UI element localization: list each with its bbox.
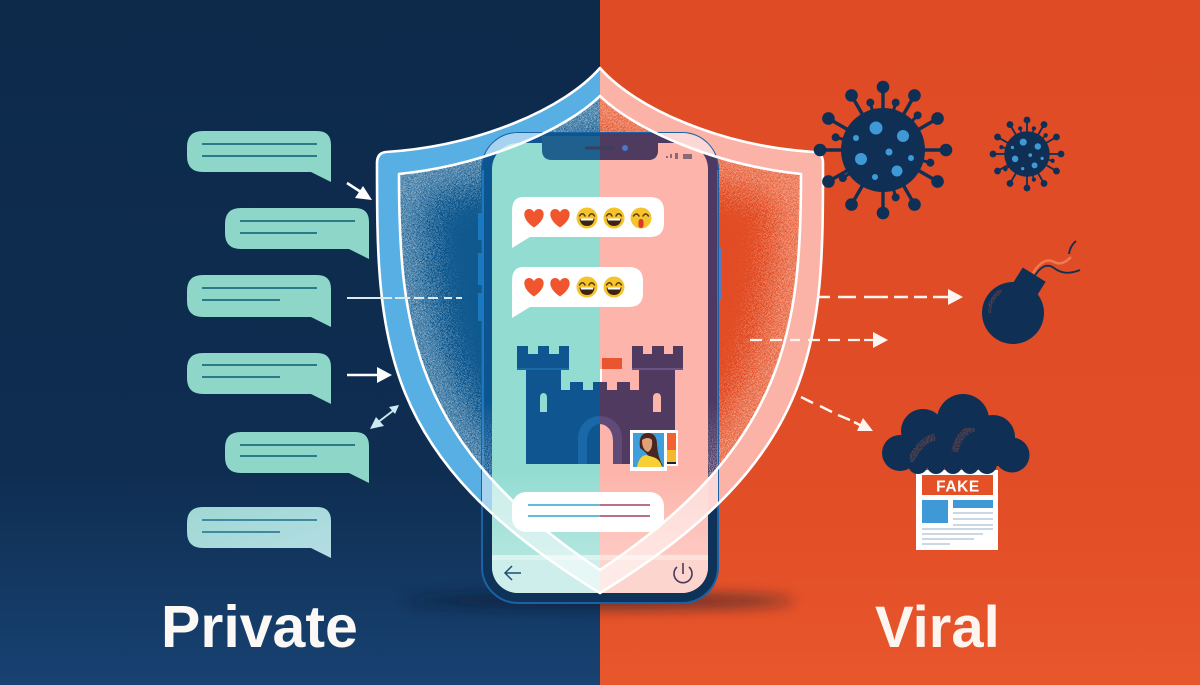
phone screen — [492, 143, 708, 593]
message input — [512, 492, 664, 532]
phone side buttons — [478, 213, 722, 321]
shield outlines — [377, 68, 823, 593]
arrow: diagonal into shield — [347, 183, 372, 200]
background: viral side — [600, 0, 1200, 685]
arrow: dashed mid — [750, 332, 888, 348]
phone — [478, 130, 722, 610]
chat bubble 2 — [225, 208, 369, 259]
tongue emoji — [630, 208, 652, 228]
chat bubble 5 — [225, 432, 369, 483]
castle left half — [517, 346, 600, 464]
newspaper — [916, 470, 998, 550]
newspaper: FAKE — [936, 478, 980, 496]
chat bubbles column — [187, 131, 369, 558]
flag — [600, 358, 622, 382]
back icon — [505, 566, 521, 580]
speaker and camera — [585, 145, 628, 151]
photo cards — [630, 430, 678, 471]
shield glass overlay — [480, 130, 720, 605]
castle windows — [540, 393, 661, 412]
shield body — [378, 70, 822, 501]
arrow: dashed line through shield — [347, 297, 462, 299]
background: private side — [0, 0, 600, 685]
chat bubble 1 — [187, 131, 331, 182]
bomb fuse — [1033, 241, 1080, 279]
emoji bubble one — [512, 197, 664, 248]
phone body — [480, 130, 720, 610]
arrow: solid into shield — [347, 367, 392, 383]
storm cloud — [882, 394, 1030, 474]
castle — [517, 346, 683, 464]
heading: Private: Private — [161, 594, 358, 660]
chat bubble 3 — [187, 275, 331, 327]
phone ground shadow — [405, 594, 795, 608]
icon: large virus — [814, 81, 952, 219]
arrow: dashed to cloud — [801, 397, 873, 431]
icon: bomb — [982, 241, 1080, 344]
heading: Viral: Viral — [875, 595, 1000, 660]
arrow: double headed — [370, 405, 399, 429]
icon: fake news — [882, 394, 1030, 550]
chat bubble 6 — [187, 507, 331, 558]
power icon — [674, 563, 692, 583]
emoji bubble two — [512, 267, 643, 318]
chat bubble 4 — [187, 353, 331, 404]
castle right half — [600, 346, 683, 464]
arrow: dashed to bomb — [817, 289, 963, 305]
notch — [542, 136, 658, 160]
icon: small virus — [990, 117, 1064, 191]
status icons — [666, 153, 692, 159]
